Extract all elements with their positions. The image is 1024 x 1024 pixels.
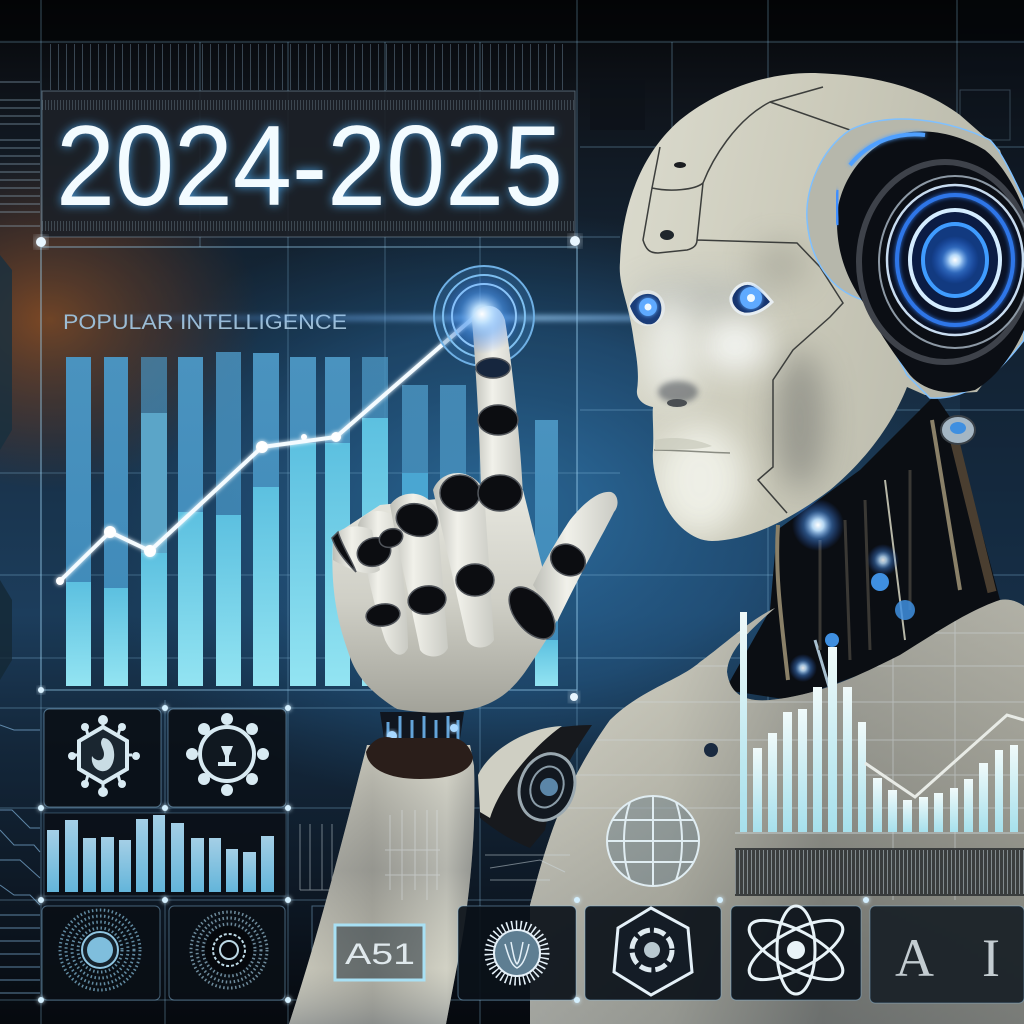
ear disc: [836, 131, 1024, 393]
eyes: [629, 284, 830, 326]
finger joints: [332, 358, 591, 647]
fingers: [333, 306, 618, 656]
icon: AI label: [870, 906, 1024, 1003]
icon: A5 framed box: [335, 925, 424, 980]
bottom icon boxes: [335, 906, 1024, 1003]
robot head: [620, 73, 1024, 541]
icon row 3 left: [42, 906, 285, 1000]
icon: gear 1: [44, 709, 161, 807]
small bar chart panel: [44, 813, 286, 896]
nose and lips: [654, 399, 730, 453]
chart label: POPULAR INTELLIGENCE: [63, 311, 347, 334]
trend line: [56, 312, 480, 585]
wrist mechanism: [380, 712, 464, 752]
lens flare rings: [60, 266, 1024, 366]
panel frame behind A5 box: [312, 906, 450, 1000]
wrist collar: [366, 737, 473, 779]
icon: hex gear: [585, 906, 721, 1000]
icon: gear 2: [168, 709, 286, 807]
fingertip flare: [442, 274, 522, 354]
palm: [332, 490, 556, 713]
grid junction glows: [38, 705, 869, 1003]
forearm: [289, 712, 474, 1024]
robot body: [300, 590, 1024, 1024]
icon: A5 framed box: A51: [345, 938, 415, 971]
robot hand: [332, 306, 618, 713]
bar chart: [66, 352, 558, 686]
title text: 2024-2025: [56, 103, 563, 230]
icon: radiant circle: [458, 906, 576, 1000]
title panel: [42, 91, 575, 237]
face shading: [630, 241, 826, 535]
faint mechanism sketch: [300, 824, 570, 890]
icon: atom: [731, 906, 861, 1000]
neck and mechanics: [725, 395, 1000, 700]
icon: radial scan 1: [42, 906, 160, 1000]
head silhouette: [620, 73, 1024, 541]
icon: AI label: AI: [895, 928, 1000, 988]
icon row 1: [44, 709, 286, 807]
panel: main chart: [36, 236, 580, 701]
head seams: [643, 87, 850, 513]
icon: globe grid: [607, 796, 699, 886]
shoulder joint: [478, 725, 592, 848]
chart on chest: [704, 612, 1024, 896]
ear band: [807, 119, 1024, 398]
icon: radial scan 2: [169, 906, 285, 1000]
